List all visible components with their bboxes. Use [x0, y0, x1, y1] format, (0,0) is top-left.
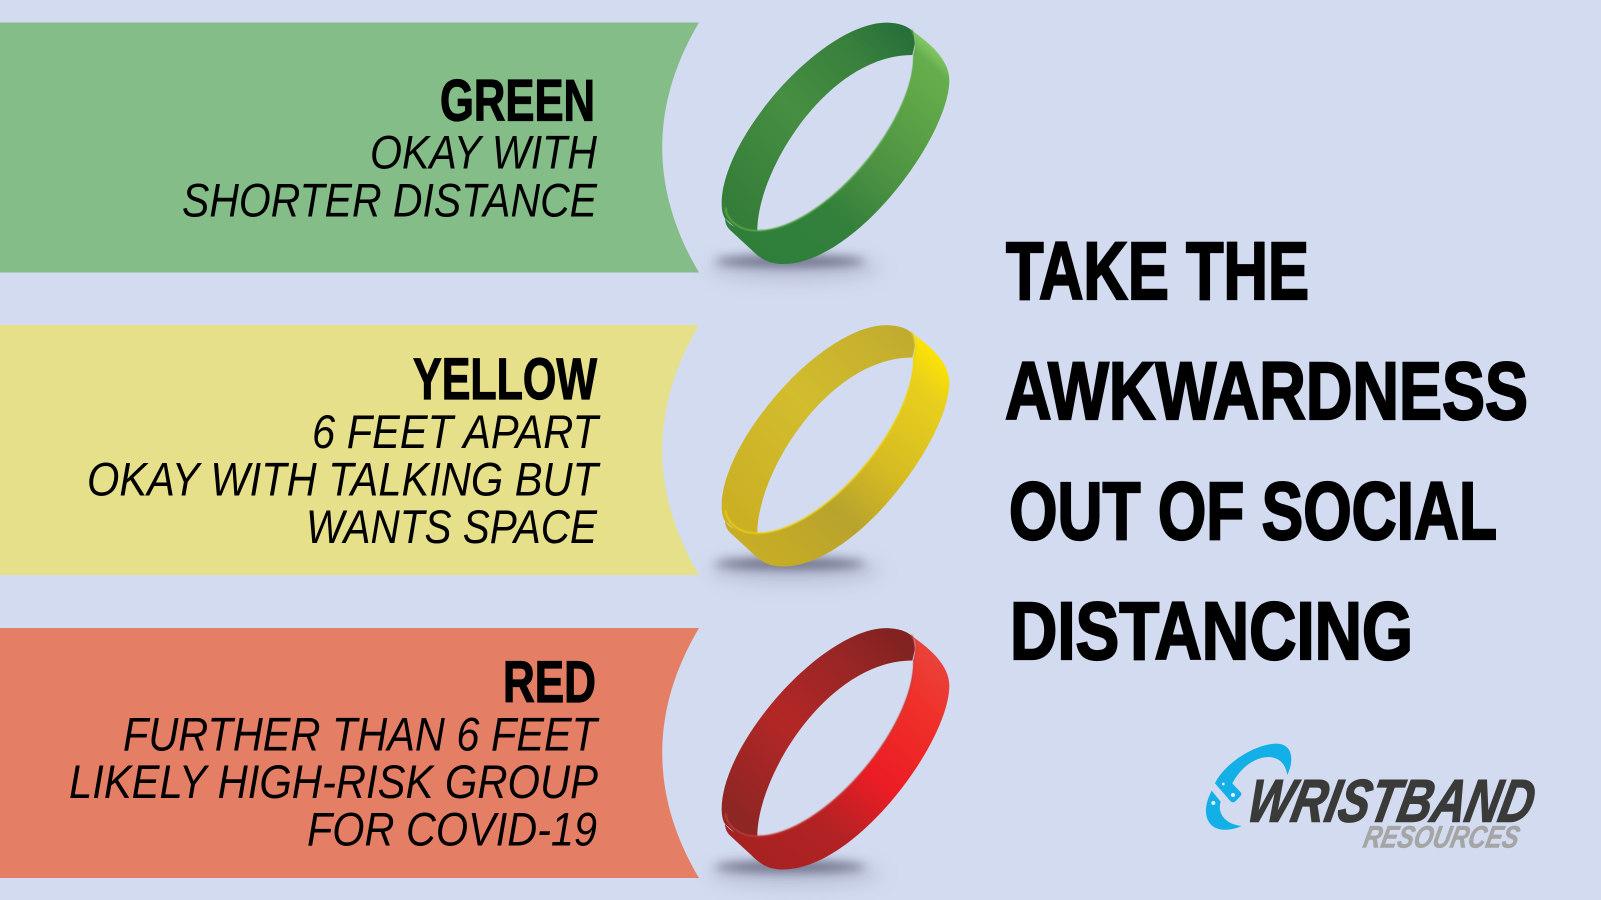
heading: red: RED	[503, 650, 596, 715]
heading: green: GREEN	[440, 68, 595, 134]
icon: blue band clasp	[1206, 744, 1291, 830]
text: likely high-risk group: LIKELY HIGH-RISK GROUP	[69, 755, 599, 808]
heading: yellow: YELLOW	[413, 347, 597, 412]
panel: green banner	[0, 22, 699, 272]
text: further than 6 feet: FURTHER THAN 6 FEET	[123, 708, 600, 760]
title	[1005, 226, 1528, 677]
icon: red wristband	[708, 628, 949, 888]
logo wordmark: resources: RESOURCES	[1361, 820, 1523, 854]
logo: wristband resources	[1206, 744, 1542, 854]
panel: red banner	[0, 628, 699, 878]
text: 6 feet apart: 6 FEET APART	[312, 405, 601, 458]
text: for covid-19: FOR COVID-19	[307, 802, 597, 856]
text: wants space: WANTS SPACE	[306, 500, 598, 553]
banner shape: red	[0, 628, 699, 878]
panel: yellow banner	[0, 325, 699, 575]
text: okay with: OKAY WITH	[370, 126, 597, 178]
banner shape: yellow	[0, 325, 699, 575]
banner shape: green	[0, 22, 699, 272]
title: TAKE THE	[1006, 226, 1309, 317]
text: shorter distance: SHORTER DISTANCE	[182, 174, 598, 226]
title: DISTANCING	[1010, 586, 1413, 677]
icon: green wristband	[708, 23, 949, 282]
text: okay with talking but: OKAY WITH TALKING BUT	[87, 452, 601, 506]
icon: yellow wristband	[708, 325, 949, 585]
